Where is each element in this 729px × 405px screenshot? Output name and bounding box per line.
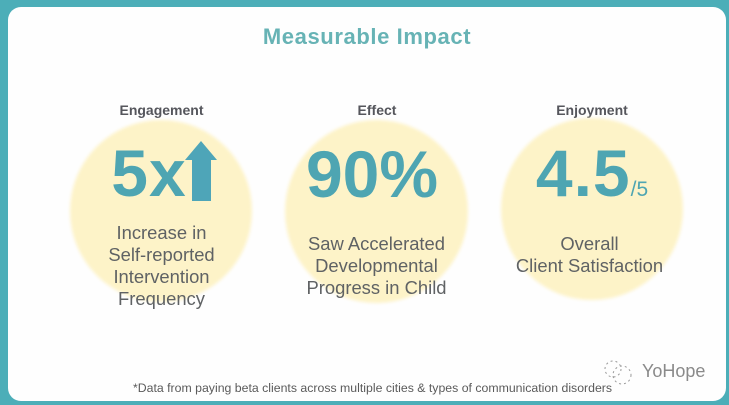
icon: up arrow xyxy=(185,141,217,201)
stat: 4.5/5: 4.5/5 xyxy=(536,136,648,210)
stat: 5x: 5x xyxy=(111,136,187,210)
heading: effect: Effect xyxy=(358,102,396,118)
heading: engagement: Engagement xyxy=(119,102,204,118)
stat: 90%: 90% xyxy=(306,137,438,211)
text: enjoyment description: Overall xyxy=(560,233,619,254)
text: enjoyment description: Client Satisfaction xyxy=(516,255,663,276)
text: effect description: Developmental xyxy=(315,255,438,276)
watermark: YoHope: YoHope xyxy=(642,361,705,381)
title: Measurable Impact xyxy=(263,24,471,49)
text: enjoyment description xyxy=(516,233,663,276)
footnote: *Data from paying beta clients across multiple cities & types of communication disorders xyxy=(133,381,612,395)
circle: engagement xyxy=(70,120,252,302)
text: engagement description xyxy=(108,222,215,309)
heading: enjoyment: Enjoyment xyxy=(556,102,628,118)
text: effect description xyxy=(306,233,447,298)
watermark: YoHope xyxy=(604,360,705,384)
text: engagement description: Intervention xyxy=(113,266,210,287)
circle: enjoyment xyxy=(501,118,683,300)
text: engagement description: Frequency xyxy=(118,288,205,309)
text: engagement description: Increase in xyxy=(117,222,206,243)
text: effect description: Saw Accelerated xyxy=(308,233,445,254)
text: effect description: Progress in Child xyxy=(306,277,447,298)
text: engagement description: Self-reported xyxy=(108,244,215,265)
circle: effect xyxy=(285,120,468,303)
